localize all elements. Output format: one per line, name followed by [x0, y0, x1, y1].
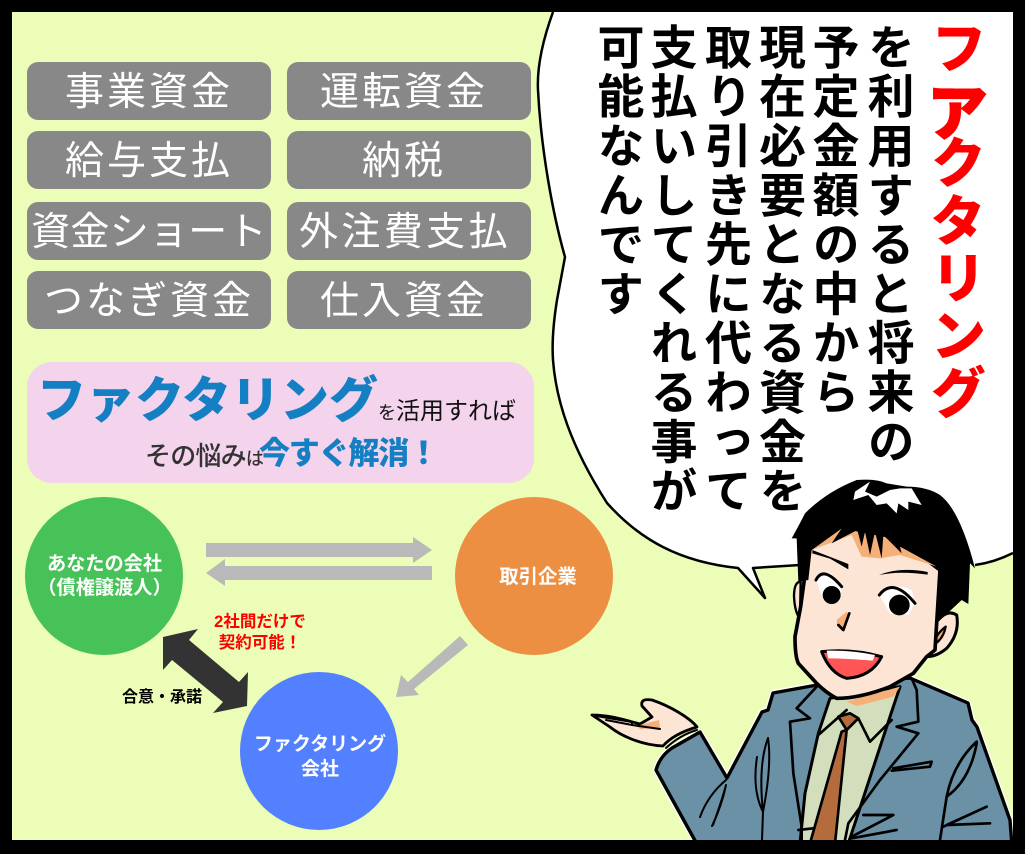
label: trading company: 取引企業 — [499, 566, 577, 588]
button: 運転資金 — [287, 62, 531, 120]
arrow: trading company to factoring company — [396, 636, 468, 697]
button: 給与支払: 給与支払 — [65, 140, 233, 183]
label: two party contract: 契約可能！ — [219, 634, 301, 652]
lapels — [790, 678, 990, 840]
callout: factoring solves it — [27, 362, 534, 483]
label: factoring company: 会社 — [301, 759, 339, 780]
callout text: を活用すれば: を活用すれば — [378, 398, 516, 425]
sleeve folds — [666, 730, 697, 748]
neck shadow — [847, 687, 900, 706]
button: つなぎ資金 — [27, 271, 271, 329]
eyebrows — [812, 550, 928, 575]
hair — [792, 480, 975, 623]
hair highlight — [853, 482, 922, 513]
speech text column 2: 予定金額の中から — [806, 23, 858, 417]
speech text column 5: 支払いしてくれる事が — [644, 23, 696, 516]
node: factoring company — [240, 672, 398, 830]
face — [795, 527, 940, 698]
button: 事業資金: 事業資金 — [65, 71, 233, 114]
label: two party contract: 2社間だけで — [214, 613, 306, 631]
button: 外注費支払 — [287, 202, 531, 260]
right ear — [927, 613, 957, 657]
label: your company: （債権譲渡人） — [37, 578, 172, 599]
frame: bottom border — [0, 840, 1025, 854]
right eye — [879, 587, 915, 615]
button: 外注費支払: 外注費支払 — [299, 211, 511, 254]
button: 仕入資金: 仕入資金 — [320, 280, 488, 323]
arrow: agreement double arrow — [163, 629, 248, 713]
arrow: to your company — [206, 559, 432, 586]
left eye — [816, 572, 842, 602]
label: factoring company — [254, 734, 386, 780]
frame: right border — [1013, 0, 1025, 854]
speech text column 4: 取り引き先に代わって — [698, 23, 751, 516]
node: your company — [25, 497, 183, 655]
label: your company: あなたの会社 — [47, 554, 162, 575]
speech text column 3: 現在必要となる資金を — [752, 23, 805, 516]
nose — [837, 612, 849, 630]
callout text: その悩みは: その悩みは — [145, 441, 263, 471]
speech text: ファクタリング in red: フ クタリング — [923, 19, 986, 422]
panel: funding need buttons — [27, 62, 531, 329]
button: つなぎ資金: つなぎ資金 — [44, 280, 254, 323]
button: 運転資金: 運転資金 — [320, 71, 488, 114]
callout heading: ファクタリング: ファクタリング — [37, 374, 378, 428]
button: 仕入資金 — [287, 271, 531, 329]
speech text column 1: を利用すると将来の — [860, 23, 914, 467]
jacket and arm — [592, 678, 1012, 846]
button: 納税: 納税 — [362, 140, 446, 183]
label: agreement: 合意・承諾 — [122, 689, 202, 706]
button: 納税 — [287, 131, 531, 189]
collar — [818, 710, 892, 742]
shirt — [800, 687, 900, 843]
button: 給与支払 — [27, 131, 271, 189]
button: 資金ショート: 資金ショート — [31, 211, 267, 254]
mouth — [822, 651, 882, 678]
arrow: to trading company — [206, 537, 432, 563]
forehead shadow — [812, 528, 937, 567]
speech text column 6: 可能なんです — [590, 23, 644, 319]
node: trading company — [455, 497, 613, 655]
label: your company — [37, 553, 172, 599]
left ear — [794, 582, 801, 618]
head and torso detail — [790, 480, 990, 843]
button: 事業資金 — [27, 62, 271, 120]
hand — [592, 700, 697, 746]
callout emphasis: 今すぐ解消: 今すぐ解消！ — [259, 436, 438, 471]
necktie — [810, 713, 858, 843]
label: two party contract — [214, 612, 306, 652]
label: factoring company: ファクタリング — [254, 734, 386, 755]
speech text: ファクタリング in red: ァ — [901, 72, 989, 152]
